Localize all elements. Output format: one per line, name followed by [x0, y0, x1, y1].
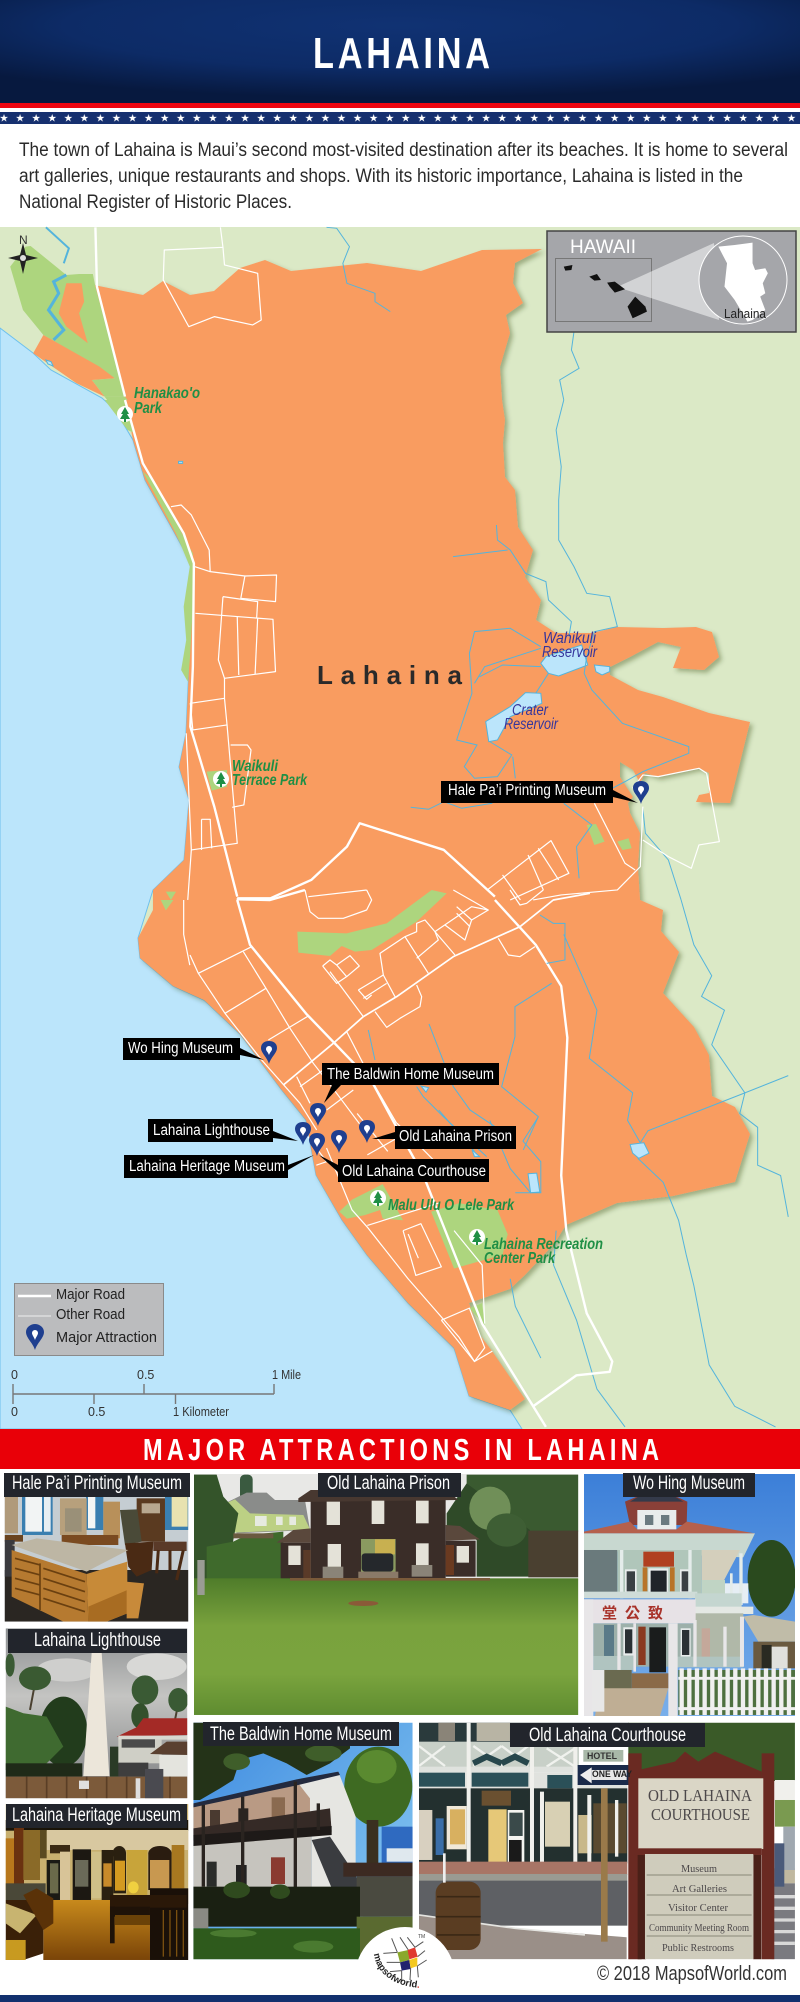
icon: park trees [117, 406, 485, 1245]
sign text: Public Restrooms [662, 1942, 734, 1954]
inset: Hawaii locator [547, 231, 796, 332]
Chinese signboard: 公 [625, 1605, 640, 1622]
scale bar: 0 [11, 1405, 18, 1419]
label: The Baldwin Home Museum: The Baldwin Home Museum [327, 1066, 494, 1083]
photo: Lahaina Heritage Museum [6, 1804, 188, 1960]
footer bar [0, 1995, 800, 2002]
sign text: HOTEL [587, 1751, 617, 1761]
legend [14, 1284, 164, 1356]
stripe and stars band [0, 103, 800, 124]
scale bar: 0 [11, 1368, 18, 1382]
place labels: Reservoir [542, 644, 598, 661]
label: Old Lahaina Prison: Old Lahaina Prison [399, 1128, 512, 1145]
place labels: Lahaina Recreation [484, 1236, 603, 1253]
label: Old Lahaina Courthouse: Old Lahaina Courthouse [342, 1163, 486, 1180]
sign text: Art Galleries [672, 1883, 727, 1895]
scale bar: 0.5 [88, 1405, 105, 1419]
place labels: Terrace Park [232, 772, 308, 789]
place labels: Crater [512, 702, 549, 719]
inset: Hawaii locator: HAWAII [570, 237, 636, 258]
sign text: Museum [681, 1863, 717, 1875]
label: The Baldwin Home Museum [322, 1063, 499, 1103]
section heading bar: MAJOR ATTRACTIONS IN LAHAINA [143, 1432, 659, 1467]
photo: Hale Pa'i Printing Museum [4, 1473, 190, 1622]
photo: The Baldwin Home Museum [193, 1722, 413, 1960]
icon: attraction pins [261, 781, 649, 1156]
title: LAHAINA [313, 29, 490, 78]
place labels: Lahaina [317, 660, 463, 690]
compass [8, 233, 38, 274]
roads, rivers, parks and lakes [10, 227, 788, 1427]
place labels: Reservoir [504, 716, 559, 733]
label: Lahaina Heritage Museum: Lahaina Heritage Museum [129, 1158, 285, 1175]
intro text [19, 140, 788, 213]
legend: Major Attraction [56, 1330, 157, 1346]
scale bar: 1 Mile [272, 1368, 301, 1382]
photo: Hale Pa'i Printing Museum: Hale Pa’i Printing Museum [12, 1473, 182, 1494]
sign text: Community Meeting Room [649, 1923, 749, 1934]
sign text: COURTHOUSE [651, 1805, 750, 1824]
place labels: Malu Ulu O Lele Park [388, 1197, 515, 1214]
Chinese signboard [602, 1605, 663, 1622]
header banner [0, 0, 800, 103]
label: Old Lahaina Prison [372, 1126, 516, 1149]
sign text [587, 1751, 753, 1954]
photo: Lahaina Lighthouse: Lahaina Lighthouse [34, 1630, 161, 1651]
legend: Other Road [56, 1307, 125, 1323]
photo: Old Lahaina Courthouse [419, 1723, 795, 1960]
label: Old Lahaina Courthouse [319, 1155, 489, 1182]
land: Lahaina [94, 249, 750, 1410]
photo: Old Lahaina Courthouse: Old Lahaina Courthouse [529, 1725, 686, 1746]
photo: Lahaina Lighthouse [5, 1628, 188, 1798]
sea [0, 328, 522, 1429]
place labels: Wahikuli [543, 630, 597, 647]
label: Lahaina Lighthouse [148, 1119, 298, 1142]
inset: Hawaii locator: Lahaina [724, 306, 767, 321]
scale bar: 0.5 [137, 1368, 154, 1382]
place labels: Park [134, 400, 163, 417]
logo: TM [418, 1934, 425, 1940]
photo: Lahaina Heritage Museum: Lahaina Heritage Museum [12, 1805, 181, 1826]
panel: map [0, 227, 800, 1429]
photo: Old Lahaina Prison: Old Lahaina Prison [327, 1473, 450, 1494]
label: Wo Hing Museum [123, 1038, 264, 1060]
photo: Wo Hing Museum [584, 1473, 796, 1716]
logo: mapsofworld.com [374, 1953, 419, 1988]
scale bar [11, 1368, 301, 1419]
intro text: art galleries, unique restaurants and shops. With its historic importance, Lahaina is listed in the [19, 166, 743, 187]
photo: Wo Hing Museum: Wo Hing Museum [633, 1473, 745, 1494]
compass: N [19, 233, 28, 247]
Chinese signboard: 致 [648, 1605, 663, 1622]
scale bar: 1 Kilometer [173, 1405, 229, 1419]
intro text: National Register of Historic Places. [19, 192, 292, 213]
Chinese signboard: 堂 [602, 1605, 617, 1622]
place labels: Center Park [484, 1250, 556, 1267]
place labels: Waikuli [232, 758, 279, 775]
place labels: Hanakao'o [134, 385, 200, 402]
label: Lahaina Lighthouse: Lahaina Lighthouse [153, 1122, 270, 1139]
sign text: ONE WAY [592, 1769, 632, 1779]
label: Hale Pa'i Printing Museum: Hale Pa’i Printing Museum [448, 782, 606, 799]
section heading bar [0, 1429, 800, 1469]
photo: Old Lahaina Prison [194, 1473, 578, 1715]
legend: Major Road [56, 1287, 125, 1303]
place labels [134, 385, 603, 1267]
sign text: Visitor Center [668, 1902, 728, 1914]
photo: The Baldwin Home Museum: The Baldwin Home Museum [210, 1724, 392, 1745]
sign text: OLD LAHAINA [648, 1786, 753, 1805]
label: Wo Hing Museum: Wo Hing Museum [128, 1040, 233, 1057]
